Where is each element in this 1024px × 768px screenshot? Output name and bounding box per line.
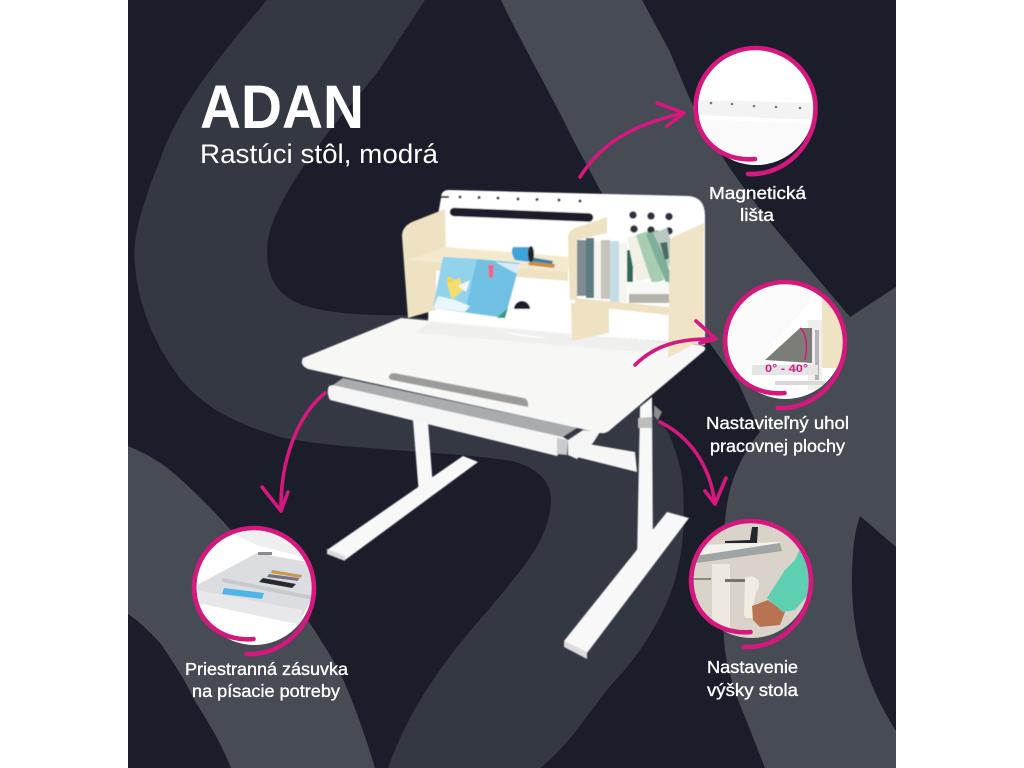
ring — [691, 521, 811, 647]
title: ADAN — [200, 73, 364, 141]
photo: magnetic strip — [698, 50, 814, 165]
label — [185, 659, 348, 701]
wood hutch left — [402, 209, 570, 318]
callout: height adjustment — [685, 515, 820, 700]
callout: drawer — [185, 525, 348, 701]
wood hutch centre — [568, 217, 609, 341]
callout: adjustable angle — [706, 280, 850, 456]
drawer — [328, 378, 577, 456]
callout: magnetic strip — [690, 45, 820, 225]
books — [577, 228, 672, 303]
arrow: to height adjustment — [660, 422, 726, 504]
frame beam — [577, 442, 637, 472]
label: pracovnej plochy — [710, 436, 845, 456]
label: lišta — [740, 205, 774, 225]
grey wrist pad — [389, 373, 528, 407]
arrow: to magnetic strip — [580, 103, 684, 177]
drawer knob bracket — [568, 430, 600, 459]
label: výšky stola — [707, 680, 798, 700]
label: Magnetická — [709, 183, 806, 203]
photo: drawer tray — [196, 530, 312, 645]
ring — [194, 528, 314, 654]
ring — [725, 282, 845, 408]
wood side panel right — [668, 223, 704, 358]
wood shelf right — [575, 298, 669, 315]
photo: tilted desktop: 0° - 40° — [765, 363, 808, 375]
arrow: to drawer — [262, 393, 325, 511]
right leg and foot — [564, 397, 689, 659]
left leg and foot — [327, 420, 478, 561]
subtitle: Rastúci stôl, modrá — [200, 139, 439, 169]
label — [707, 657, 798, 700]
label: Nastaviteľný uhol — [706, 413, 849, 433]
photo: crank and hand — [694, 523, 809, 638]
arrow: to adjustable angle — [635, 321, 716, 365]
desk product illustration — [302, 190, 705, 659]
label: na písacie potreby — [192, 681, 340, 701]
photo: tilted desktop — [728, 284, 843, 399]
label — [706, 413, 849, 456]
desk top — [302, 318, 705, 433]
background panel with swooshes — [128, 0, 896, 768]
ring — [696, 48, 816, 174]
label — [709, 183, 806, 225]
label: Nastavenie — [707, 657, 798, 677]
pencil cup — [512, 246, 555, 268]
open book — [433, 257, 520, 318]
label: Priestranná zásuvka — [185, 659, 348, 679]
magnetic board — [428, 190, 705, 345]
